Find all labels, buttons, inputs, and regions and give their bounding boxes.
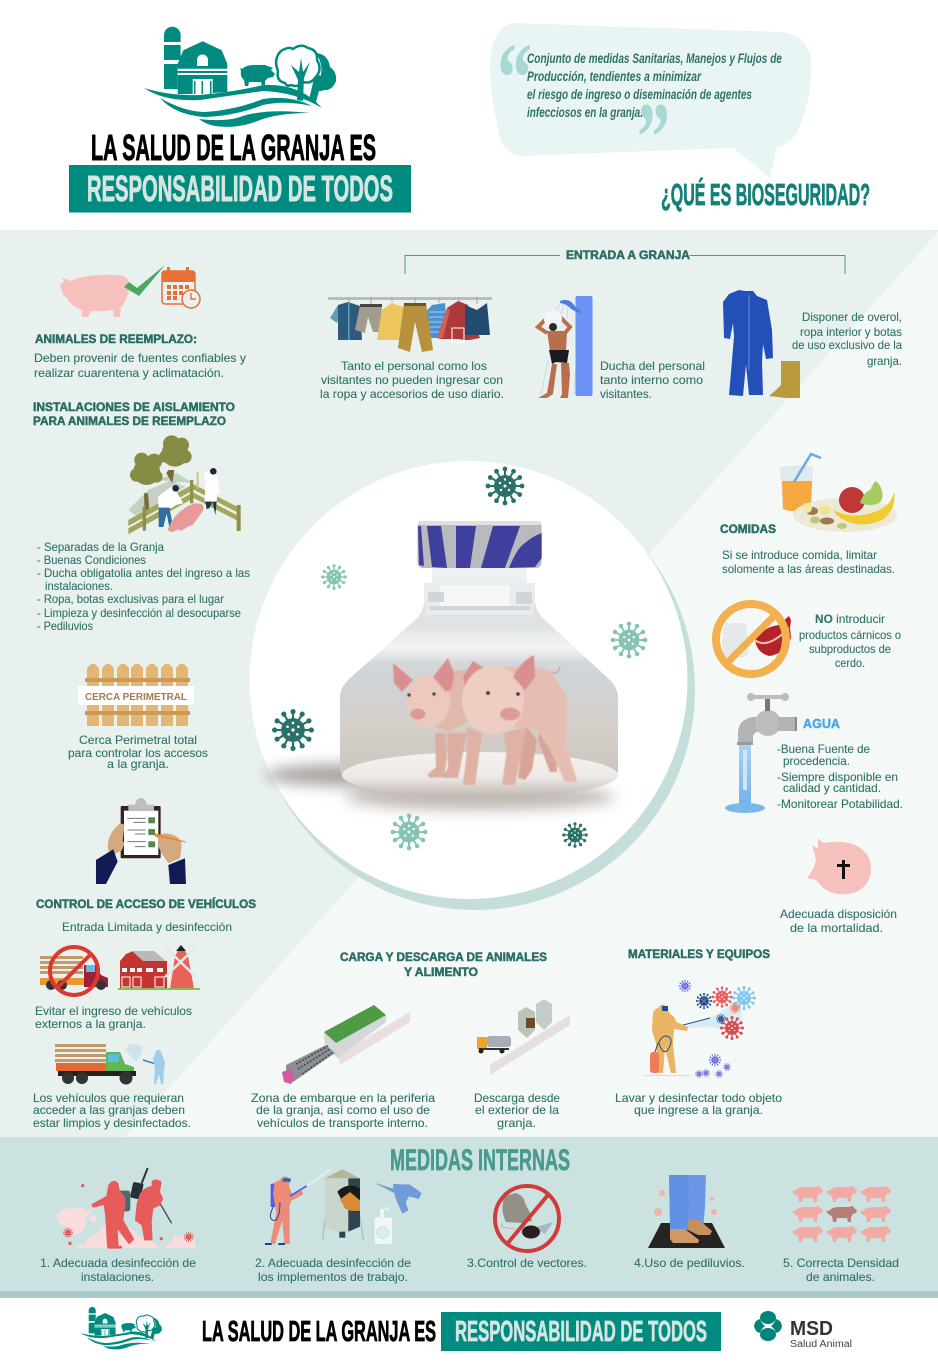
panel: carga y descarga: Zona de embarque en la periferia <box>251 1091 435 1105</box>
panel: no carnicos: subproductos de <box>809 642 891 656</box>
title: la salud de la granja es: LA SALUD DE LA GRANJA ES <box>91 127 376 168</box>
panel: agua: AGUA <box>803 717 840 731</box>
footer: LA SALUD DE LA GRANJA ES <box>202 1316 436 1348</box>
panel: animales de reemplazo: ANIMALES DE REEMPLAZO: <box>35 332 197 346</box>
icon: glass bottle <box>340 521 618 798</box>
icon: virus light right <box>611 622 647 658</box>
panel: no carnicos: productos cárnicos o <box>799 628 901 642</box>
panel: control de acceso de vehiculos: Entrada Limitada y desinfección <box>62 920 232 934</box>
speech bubble definition: Producción, tendientes a minimizar <box>527 68 702 84</box>
panel: entrada a granja: de uso exclusivo de la <box>792 338 902 352</box>
title banner <box>69 165 411 212</box>
panel: no carnicos <box>716 604 901 674</box>
icon: silos and feed truck <box>477 999 570 1075</box>
panel: control de acceso de vehiculos: Evitar el ingreso de vehículos <box>35 1004 192 1018</box>
panel: entrada a granja <box>320 248 902 401</box>
logo: MSD: MSD <box>790 1318 833 1340</box>
panel: mortalidad <box>780 838 897 935</box>
panel: instalaciones de aislamiento: INSTALACIONES DE AISLAMIENTO <box>33 400 235 414</box>
footer <box>80 1307 852 1351</box>
icon: forbidden meat <box>716 604 791 674</box>
panel: instalaciones de aislamiento: - Pediluvios <box>37 619 93 633</box>
panel: medidas internas: instalaciones. <box>81 1270 154 1284</box>
panel: carga y descarga <box>251 950 570 1130</box>
panel: entrada a granja: tanto interno como <box>600 373 703 387</box>
lighter diagonal panel <box>125 232 938 1137</box>
panel: medidas internas <box>0 1137 938 1298</box>
icon: clothes rack <box>328 297 492 352</box>
panel: materiales y equipos <box>615 947 782 1117</box>
panel: comidas: Si se introduce comida, limitar <box>722 548 877 562</box>
panel: carga y descarga: de la granja, así como el uso de <box>256 1103 430 1117</box>
panel: control de acceso de vehiculos: estar limpios y desinfectados. <box>33 1116 191 1130</box>
icon: forbidden rat and fly <box>495 1186 559 1251</box>
panel: entrada a granja: ropa interior y botas <box>800 325 902 339</box>
panel: animales de reemplazo: Deben provenir de fuentes confiables y <box>34 351 246 365</box>
icon: barn and windmill <box>118 945 200 990</box>
panel: comidas: COMIDAS <box>720 522 776 536</box>
panel: carga y descarga: Descarga desde <box>474 1091 560 1105</box>
panel: control de acceso de vehiculos: CONTROL DE ACCESO DE VEHÍCULOS <box>36 896 256 911</box>
logo: MSD: Salud Animal <box>790 1339 852 1350</box>
panel: no carnicos: NO introducir <box>815 612 885 626</box>
panel: mortalidad: de la mortalidad. <box>790 921 883 935</box>
icon: silo and spray tools <box>265 1169 422 1244</box>
panel: agua: -Monitorear Potabilidad. <box>777 797 903 811</box>
panel: central circle with pigs in bottle <box>250 461 695 910</box>
icon: workers disinfecting <box>57 1168 196 1249</box>
speech bubble definition: ” <box>637 82 670 193</box>
icon: person in shower <box>538 296 592 398</box>
icon: virus dark left <box>272 709 314 751</box>
icon: pig with cross <box>807 838 871 894</box>
speech bubble definition: Conjunto de medidas Sanitarias, Manejos y Flujos de <box>527 50 782 66</box>
icon: virus dark bottom <box>562 822 588 848</box>
speech bubble definition: infecciosos en la granja. <box>527 104 643 120</box>
icon: clipboard checklist <box>96 798 186 884</box>
panel: no carnicos: cerdo. <box>835 656 865 670</box>
speech bubble definition: el riesgo de ingreso o diseminación de agentes <box>527 86 752 102</box>
panel: entrada a granja: visitantes no pueden ingresar con <box>321 373 503 387</box>
panel: cerca perimetral: para controlar los accesos <box>68 746 208 760</box>
icon: wooden fence: CERCA PERIMETRAL <box>85 691 188 703</box>
panel: materiales y equipos: MATERIALES Y EQUIPOS <box>628 947 770 961</box>
panel: agua: calidad y cantidad. <box>783 781 881 795</box>
panel: carga y descarga: granja. <box>497 1116 536 1130</box>
panel: agua <box>725 693 903 813</box>
panel: materiales y equipos: que ingrese a la granja. <box>634 1103 763 1117</box>
floor shadow <box>265 764 615 810</box>
icon: shed with truck <box>282 1005 410 1084</box>
panel: medidas internas: 1. Adecuada desinfección de <box>40 1256 196 1270</box>
panel: entrada a granja: Tanto el personal como los <box>341 359 487 373</box>
main light panel <box>0 230 938 1137</box>
panel: control de acceso de vehiculos: externos a la granja. <box>35 1017 146 1031</box>
icon: virus light bottom <box>391 814 427 850</box>
panel: medidas internas: 3.Control de vectores. <box>467 1256 587 1270</box>
icon: blue overall and boots <box>723 290 800 398</box>
panel: medidas internas: de animales. <box>806 1270 875 1284</box>
footer banner <box>441 1312 721 1351</box>
panel: cerca perimetral: Cerca Perimetral total <box>79 733 197 747</box>
speech bubble definition <box>490 22 811 193</box>
panel: cerca perimetral: a la granja. <box>107 757 169 771</box>
panel: comidas <box>720 454 897 576</box>
panel: entrada a granja: visitantes. <box>600 387 652 401</box>
icon: virus light left <box>321 564 347 590</box>
panel: control de acceso de vehiculos: Los vehículos que requieran <box>33 1091 184 1105</box>
speech bubble definition: “ <box>497 22 532 133</box>
panel: carga y descarga: el exterior de la <box>475 1103 559 1117</box>
panel: carga y descarga: vehículos de transporte interno. <box>257 1116 428 1130</box>
panel: entrada a granja: ENTRADA A GRANJA <box>566 248 690 262</box>
icon: vets and pig in a pen <box>128 435 241 534</box>
panel: mortalidad: Adecuada disposición <box>780 907 897 921</box>
title banner: RESPONSABILIDAD DE TODOS <box>87 168 393 209</box>
panel: agua: -Buena Fuente de <box>777 742 870 756</box>
panel: entrada a granja: Ducha del personal <box>600 359 705 373</box>
icon: virus dark top <box>486 467 524 505</box>
panel: instalaciones de aislamiento: - Ropa, botas exclusivas para el lugar <box>37 592 224 606</box>
panel: control de acceso de vehiculos <box>33 896 256 1130</box>
footer banner: RESPONSABILIDAD DE TODOS <box>455 1316 707 1348</box>
panel: instalaciones de aislamiento <box>33 400 250 633</box>
panel: carga y descarga: Y ALIMENTO <box>404 965 478 979</box>
panel: instalaciones de aislamiento: - Ducha obligatolia antes del ingreso a las <box>37 566 250 580</box>
icon: juice and fruit plate <box>780 454 897 532</box>
panel: medidas internas: 5. Correcta Densidad <box>783 1256 899 1270</box>
panel: instalaciones de aislamiento: - Limpieza y desinfección al desocuparse <box>37 606 241 620</box>
panel: comidas: solomente a las áreas destinadas. <box>722 562 895 576</box>
logo: farm <box>144 27 336 127</box>
panel: entrada a granja: granja. <box>867 354 902 368</box>
icon: worker spraying viruses <box>644 980 756 1078</box>
panel: carga y descarga: CARGA Y DESCARGA DE ANIMALES <box>340 950 547 964</box>
panel: animales de reemplazo <box>34 265 246 380</box>
panel: instalaciones de aislamiento: - Separadas de la Granja <box>37 540 164 554</box>
panel: medidas internas: 2. Adecuada desinfección de <box>255 1256 411 1270</box>
icon: calendar with clock <box>162 267 200 308</box>
panel: instalaciones de aislamiento: instalaciones. <box>45 579 113 593</box>
icon: two piglets <box>393 655 577 785</box>
panel: animales de reemplazo: realizar cuarentena y aclimatación. <box>34 366 224 380</box>
icon: legs on footbath mat <box>648 1175 725 1248</box>
logo: MSD <box>754 1311 852 1350</box>
icon: truck being disinfected <box>55 1044 165 1084</box>
icon: truck forbidden <box>40 947 108 995</box>
panel: agua: procedencia. <box>783 754 850 768</box>
panel: agua: -Siempre disponible en <box>777 770 898 784</box>
panel: cerca perimetral <box>68 664 208 771</box>
icon: water tap <box>725 693 797 813</box>
bracket <box>405 256 845 274</box>
panel: instalaciones de aislamiento: - Buenas Condiciones <box>37 553 146 567</box>
icon: pink pig with check <box>60 265 165 317</box>
panel: materiales y equipos: Lavar y desinfectar todo objeto <box>615 1091 782 1105</box>
panel: instalaciones de aislamiento: PARA ANIMALES DE REEMPLAZO <box>33 414 226 428</box>
panel: entrada a granja: Disponer de overol, <box>802 310 902 324</box>
panel: medidas internas: 4.Uso de pediluvios. <box>634 1256 745 1270</box>
icon: pigs density grid <box>792 1186 891 1242</box>
panel: entrada a granja: la ropa y accesorios de uso diario. <box>320 387 504 401</box>
panel: medidas internas: MEDIDAS INTERNAS <box>390 1144 570 1177</box>
panel: control de acceso de vehiculos: acceder a las granjas deben <box>33 1103 185 1117</box>
panel: medidas internas: los implementos de trabajo. <box>258 1270 408 1284</box>
logo: small farm <box>80 1307 162 1349</box>
